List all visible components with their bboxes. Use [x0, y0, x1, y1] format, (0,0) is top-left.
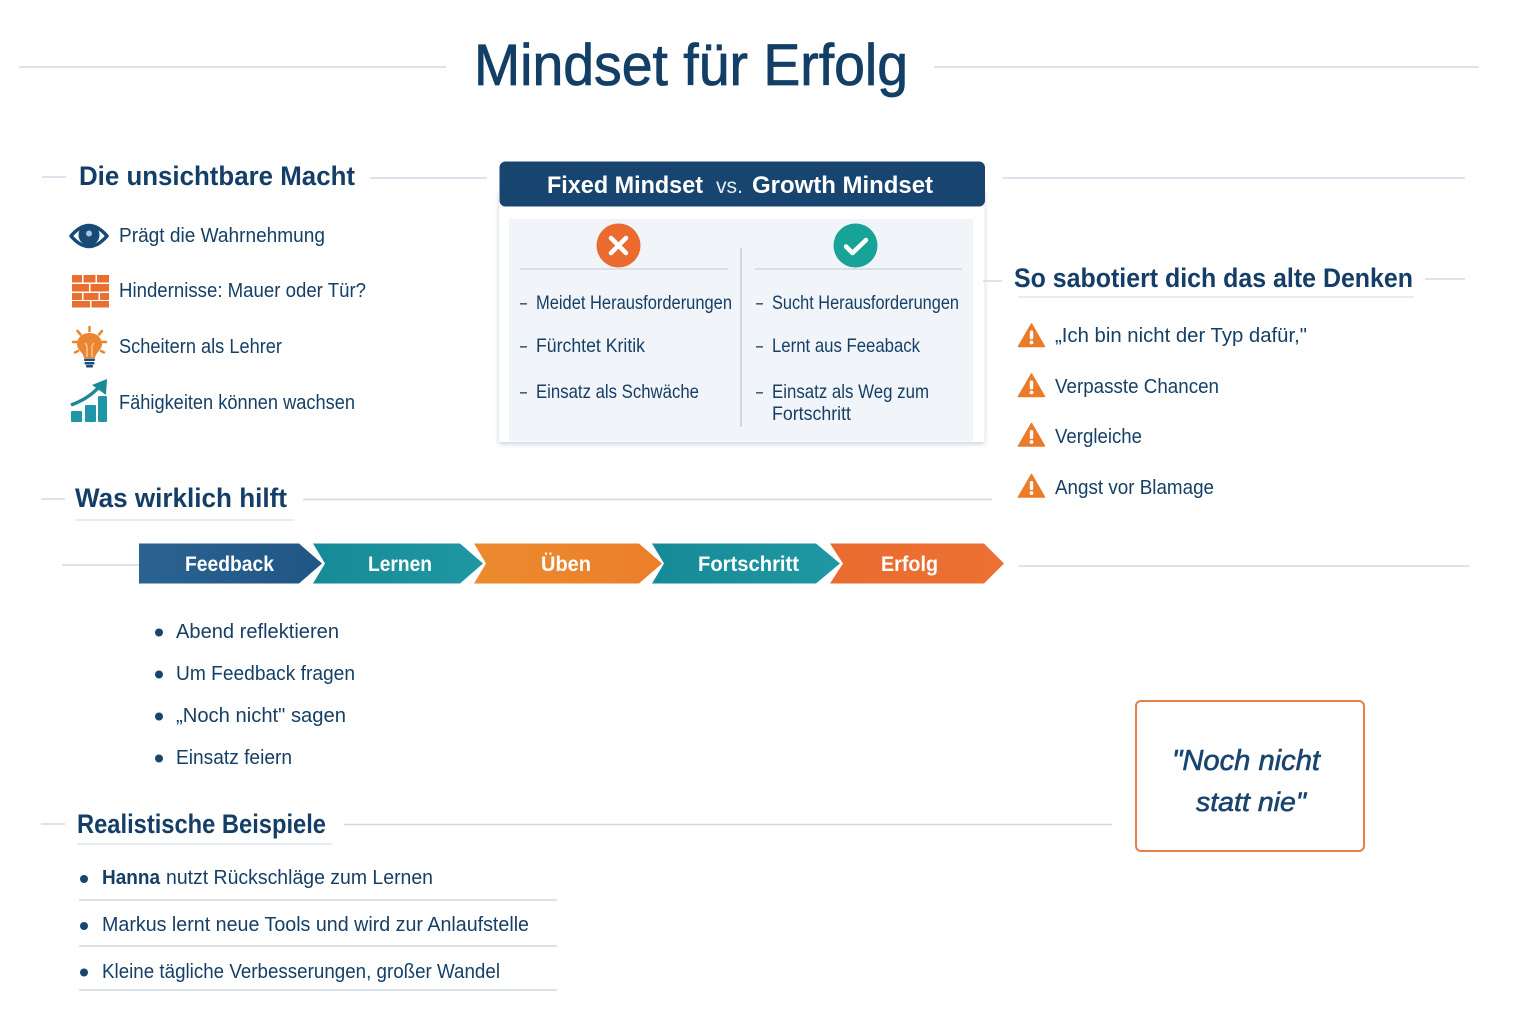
warning item 2: Verpasste Chancen: [1055, 375, 1219, 398]
arrow: Üben: [474, 544, 662, 584]
arrow: Lernen: Lernen: [368, 553, 432, 576]
bullet list: Einsatz feiern: [176, 746, 292, 769]
bullet list: Um Feedback fragen: [176, 662, 355, 685]
example 3: [79, 960, 557, 990]
arrow: Erfolg: [830, 544, 1004, 584]
header bar: vs.: [716, 175, 743, 198]
heading: Die unsichtbare Macht: Die unsichtbare Macht: [79, 161, 355, 191]
fixed mindset list: Fürchtet Kritik: [536, 335, 645, 357]
title: Mindset für Erfolg: [474, 33, 908, 98]
fixed mindset list: [520, 292, 732, 403]
header bar: Fixed Mindset: [547, 172, 703, 199]
heading: Realistische Beispiele: [77, 809, 326, 839]
callout: quote: statt nie": [1196, 787, 1307, 817]
example 2: Markus lernt neue Tools und wird zur Anlaufstelle: [102, 913, 529, 936]
inner background: [509, 219, 973, 441]
text: Scheitern als Lehrer: Scheitern als Lehrer: [119, 335, 282, 358]
fixed mindset list: Einsatz als Schwäche: [536, 381, 699, 403]
arrow: Lernen: [313, 544, 483, 584]
panel: Was wirklich hilft: [41, 483, 1469, 769]
icon: growth chart: [71, 379, 107, 422]
growth mindset list: Fortschritt: [772, 403, 852, 425]
heading: Was wirklich hilft: [75, 483, 287, 513]
text: Hindernisse: Hindernisse: Mauer oder Tür?: [119, 279, 366, 302]
fixed mindset list: –: [520, 335, 527, 357]
arrow: Erfolg: Erfolg: [881, 553, 938, 576]
callout: quote: "Noch nicht: [1172, 745, 1322, 777]
fixed mindset list: –: [520, 381, 527, 403]
arrow: Fortschritt: Fortschritt: [698, 553, 799, 576]
growth mindset list: –: [756, 292, 763, 314]
icon: light bulb: [73, 327, 106, 368]
bullet list: [155, 620, 355, 769]
growth mindset list: –: [756, 335, 763, 357]
example 3: Kleine tägliche Verbesserungen, großer Wandel: [102, 960, 500, 983]
growth mindset list: Lernt aus Feeaback: [772, 335, 920, 357]
callout: quote: [1136, 701, 1364, 851]
example 1: Hanna: [102, 866, 161, 889]
bullet list: „Noch nicht" sagen: [176, 704, 346, 727]
header bar: Growth Mindset: [752, 172, 933, 199]
text: Prägt die Wahrnehmung: Prägt die Wahrnehmung: [119, 224, 325, 247]
example 1: nutzt Rückschläge zum Lernen: [166, 866, 433, 889]
icon: check: [834, 224, 878, 268]
icon: cross: [596, 224, 640, 268]
example 1: [79, 866, 557, 900]
arrow: Üben: Üben: [541, 553, 591, 576]
growth mindset list: Einsatz als Weg zum: [772, 381, 929, 403]
arrow: Feedback: [139, 544, 322, 584]
example 2: [79, 913, 557, 946]
icon: brick wall: [72, 275, 109, 308]
panel: Fixed vs Growth Mindset: [499, 162, 985, 442]
card: [499, 190, 984, 442]
warning item 4: Angst vor Blamage: [1055, 476, 1214, 499]
heading: So sabotiert dich das alte Denken: [1014, 263, 1413, 293]
text: Fähigkeiten können wachsen: Fähigkeiten können wachsen: [119, 391, 355, 414]
process arrows: [139, 544, 1004, 584]
bullet list: Abend reflektieren: [176, 620, 339, 643]
arrow: Fortschritt: [652, 544, 840, 584]
icon: eye: [71, 224, 107, 246]
growth mindset list: [756, 292, 959, 425]
panel: Die unsichtbare Macht: [42, 161, 487, 422]
warning item 3: [1018, 424, 1142, 448]
warning item 1: „Ich bin nicht der Typ dafür,": [1055, 324, 1307, 347]
growth mindset list: –: [756, 381, 763, 403]
fixed mindset list: Meidet Herausforderungen: [536, 292, 732, 314]
fixed mindset list: –: [520, 292, 527, 314]
panel: Realistische Beispiele: [41, 809, 1112, 990]
panel: So sabotiert dich das alte Denken: [983, 263, 1465, 499]
arrow: Feedback: Feedback: [185, 553, 274, 576]
growth mindset list: Sucht Herausforderungen: [772, 292, 959, 314]
header bar: [500, 162, 985, 206]
warning item 3: Vergleiche: [1055, 425, 1142, 448]
